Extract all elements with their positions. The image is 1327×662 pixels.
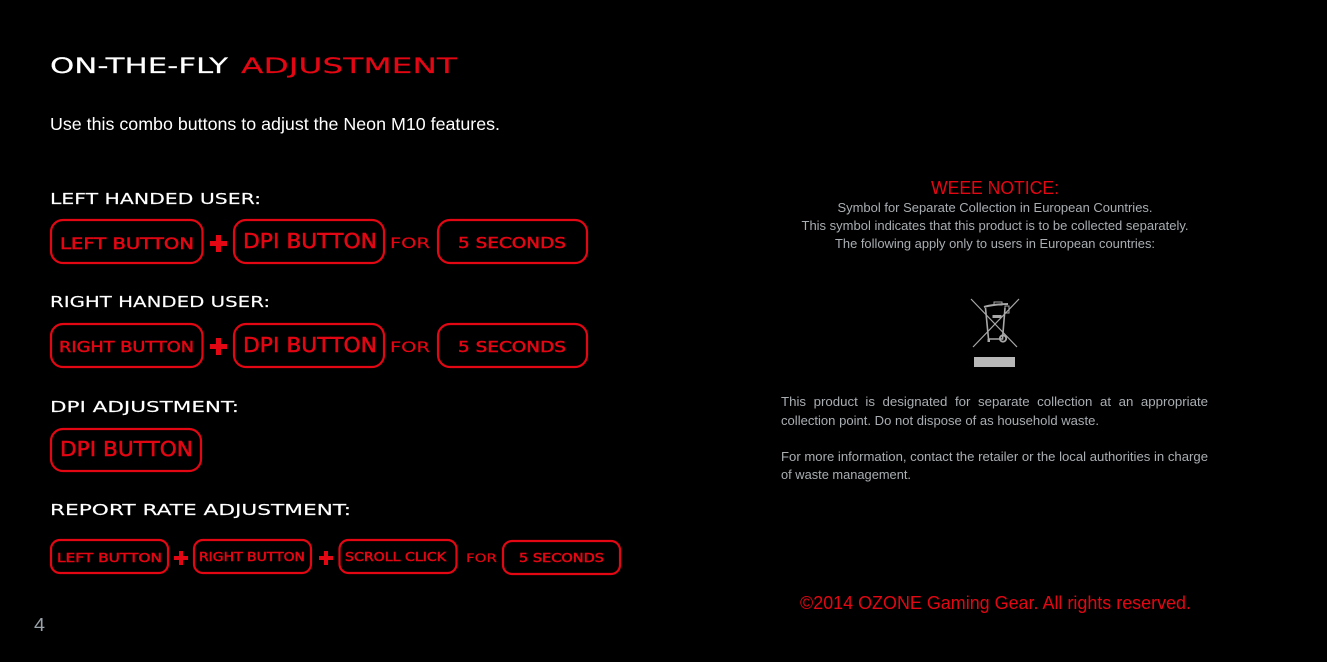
button: dpi button [234, 220, 384, 263]
weee paragraph two: of waste management. [781, 467, 911, 482]
intro text: Use this combo buttons to adjust the Neon M10 features. [50, 114, 500, 134]
button: 5 seconds [438, 220, 587, 263]
button: left button [51, 540, 168, 573]
button: dpi button: DPI BUTTON [243, 229, 377, 253]
combo: report rate [51, 540, 620, 574]
heading: right handed user: RIGHT HANDED USER: [50, 293, 270, 311]
weee paragraph two: For more information, contact the retailer or the local authorities in charge [781, 449, 1208, 464]
heading: left handed user: LEFT HANDED USER: [50, 190, 261, 208]
copyright: ©2014 OZONE Gaming Gear. All rights reserved. [800, 593, 1191, 613]
heading: report rate adjustment: REPORT RATE ADJUSTMENT: [50, 501, 351, 519]
for label: FOR [390, 340, 430, 356]
weee paragraph one [781, 394, 1208, 428]
weee intro text [802, 200, 1188, 251]
button: 5 seconds: 5 SECONDS [458, 338, 566, 356]
button: right button [51, 324, 202, 367]
weee heading: WEEE NOTICE: [931, 178, 1059, 198]
heading: dpi adjustment: DPI ADJUSTMENT: [50, 398, 239, 416]
button: 5 seconds [503, 541, 620, 574]
button: dpi button [234, 324, 384, 367]
plus sign [210, 235, 227, 252]
weee paragraph one: This product is designated for separate collection at an appropriate [781, 394, 1208, 409]
button: dpi button: DPI BUTTON [60, 437, 193, 461]
button: right button [194, 540, 311, 573]
weee intro text: The following apply only to users in European countries: [835, 236, 1155, 251]
weee paragraph one: collection point. Do not dispose of as household waste. [781, 413, 1099, 428]
for label: FOR [466, 551, 497, 565]
button: dpi button [51, 429, 201, 471]
weee intro text: This symbol indicates that this product is to be collected separately. [802, 218, 1188, 233]
button: scroll click: SCROLL CLICK [345, 549, 447, 564]
button: 5 seconds: 5 SECONDS [519, 551, 604, 565]
button: right button: RIGHT BUTTON [199, 549, 305, 564]
plus sign [174, 551, 188, 565]
title: ADJUSTMENT [241, 54, 458, 79]
weee intro text: Symbol for Separate Collection in European Countries. [838, 200, 1152, 215]
title [50, 54, 458, 79]
button: 5 seconds: 5 SECONDS [458, 234, 566, 252]
button: right button: RIGHT BUTTON [59, 338, 194, 356]
for label: FOR [390, 236, 430, 252]
button: left button: LEFT BUTTON [57, 550, 162, 565]
combo: left handed [51, 220, 587, 263]
title: ON-THE-FLY [50, 54, 229, 79]
icon: crossed-out wheelie bin [971, 299, 1019, 367]
button: left button: LEFT BUTTON [60, 234, 194, 253]
button: 5 seconds [438, 324, 587, 367]
button: dpi button: DPI BUTTON [243, 333, 377, 357]
button: scroll click [340, 540, 456, 573]
plus sign [210, 338, 227, 355]
button: left button [51, 220, 202, 263]
plus sign [319, 551, 333, 565]
combo: right handed [51, 324, 587, 367]
weee paragraph two [781, 449, 1208, 482]
page number: 4 [34, 615, 45, 635]
